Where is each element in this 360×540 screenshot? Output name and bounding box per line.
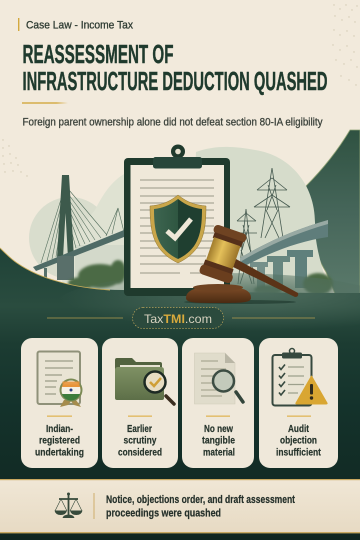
card accent — [206, 416, 230, 417]
brand divider lines — [47, 317, 315, 319]
card label: undertaking — [35, 448, 84, 458]
banner text — [106, 494, 295, 520]
icon: transmission towers — [235, 168, 290, 284]
card label — [35, 424, 84, 458]
card accent — [128, 416, 152, 417]
icon: folder with magnifier — [115, 358, 174, 404]
eyebrow: category: Case Law - Income Tax — [26, 20, 133, 32]
bushes — [68, 260, 333, 295]
card label: considered — [118, 448, 162, 458]
icon: gavel — [184, 224, 298, 304]
card label — [276, 424, 322, 458]
card label: tangible — [202, 436, 235, 446]
brand logo: TaxTMI.com: TaxTMI.com — [144, 312, 212, 326]
card label: scrutiny — [124, 436, 157, 446]
card: Earlier scrutiny considered — [102, 338, 178, 468]
card: Indian-registered undertaking — [21, 338, 98, 468]
lower green ground with gold edge — [0, 248, 360, 540]
icon: shield with check — [150, 195, 206, 263]
conclusion banner — [0, 479, 360, 533]
document lines — [140, 180, 214, 273]
card label — [118, 424, 162, 458]
title: REASSESSMENT OF — [22, 39, 174, 69]
card label: No new — [204, 424, 233, 435]
right green hill — [306, 130, 360, 296]
card label: Earlier — [127, 424, 152, 435]
card label: Audit — [288, 424, 310, 435]
brand logo: TaxTMI.com — [132, 308, 224, 328]
clipboard clip — [153, 144, 202, 168]
banner divider — [94, 493, 95, 519]
icon: certificate with flag seal — [38, 352, 82, 407]
title — [22, 39, 328, 96]
card label: Indian- — [46, 424, 73, 435]
card: Audit objection insufficient — [259, 338, 338, 468]
title underline — [22, 102, 68, 104]
hero illustration — [29, 147, 333, 295]
icon: elevated highway — [240, 220, 328, 289]
icon: scales of justice — [54, 492, 82, 518]
card label: objection — [280, 436, 317, 446]
banner text: Notice, objections order, and draft assessment — [106, 494, 295, 506]
icon: checklist with warning triangle — [272, 348, 327, 406]
card accent — [47, 416, 72, 417]
card: No new tangible material — [182, 338, 254, 468]
card label — [202, 424, 235, 458]
subtitle: Foreign parent ownership alone did not defeat section 80-IA eligibility — [22, 116, 323, 128]
pale background shapes — [29, 147, 330, 295]
card label: material — [203, 448, 235, 458]
banner text: proceedings were quashed — [106, 508, 221, 520]
clipboard illustration — [124, 144, 230, 296]
card accent — [287, 416, 311, 417]
icon: cable-stayed bridge — [33, 175, 124, 282]
icon: document with magnifier — [194, 353, 243, 404]
card label: insufficient — [276, 448, 322, 458]
dotted corner texture — [2, 4, 358, 177]
card label: registered — [39, 436, 80, 446]
